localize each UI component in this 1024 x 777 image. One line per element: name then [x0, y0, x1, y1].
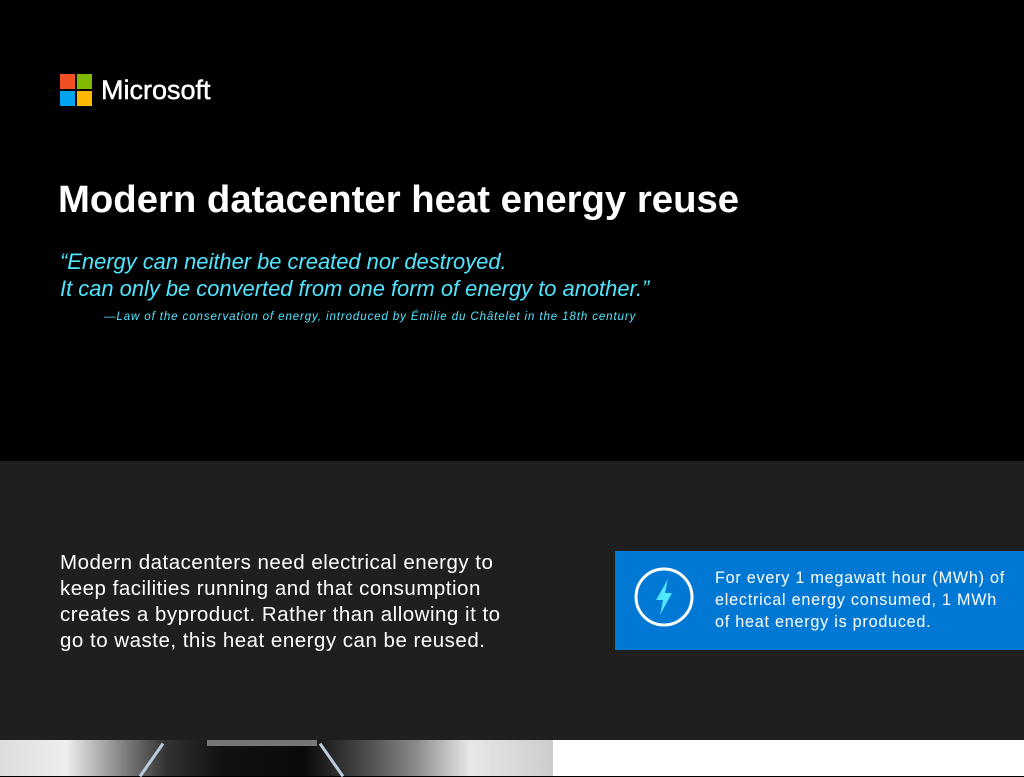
intro text: creates a byproduct. Rather than allowing it to	[60, 603, 501, 626]
quote	[60, 249, 650, 301]
white area	[553, 740, 1024, 776]
callout text: of heat energy is produced.	[715, 613, 931, 631]
callout text: electrical energy consumed, 1 MWh	[715, 591, 997, 609]
header section	[0, 0, 1024, 461]
intro section	[0, 461, 1024, 740]
intro text: Modern datacenters need electrical energy to	[60, 551, 493, 574]
intro text: go to waste, this heat energy can be reused.	[60, 629, 485, 652]
logo: Microsoft: Microsoft	[101, 75, 211, 105]
title: Modern datacenter heat energy reuse	[58, 178, 739, 221]
photo: datacenter	[0, 740, 553, 776]
intro text	[60, 551, 501, 652]
quote attribution: —Law of the conservation of energy, introduced by Émilie du Châtelet in the 18th century	[104, 311, 636, 323]
intro text: keep facilities running and that consumption	[60, 577, 481, 600]
quote: It can only be converted from one form of energy to another.”	[60, 276, 649, 301]
icon: lightning bolt	[634, 568, 694, 626]
logo: Microsoft	[60, 74, 211, 106]
quote: “Energy can neither be created nor destroyed.	[60, 249, 507, 274]
callout text: For every 1 megawatt hour (MWh) of	[715, 569, 1005, 587]
callout text	[715, 569, 1005, 631]
callout: energy fact	[615, 551, 1024, 650]
